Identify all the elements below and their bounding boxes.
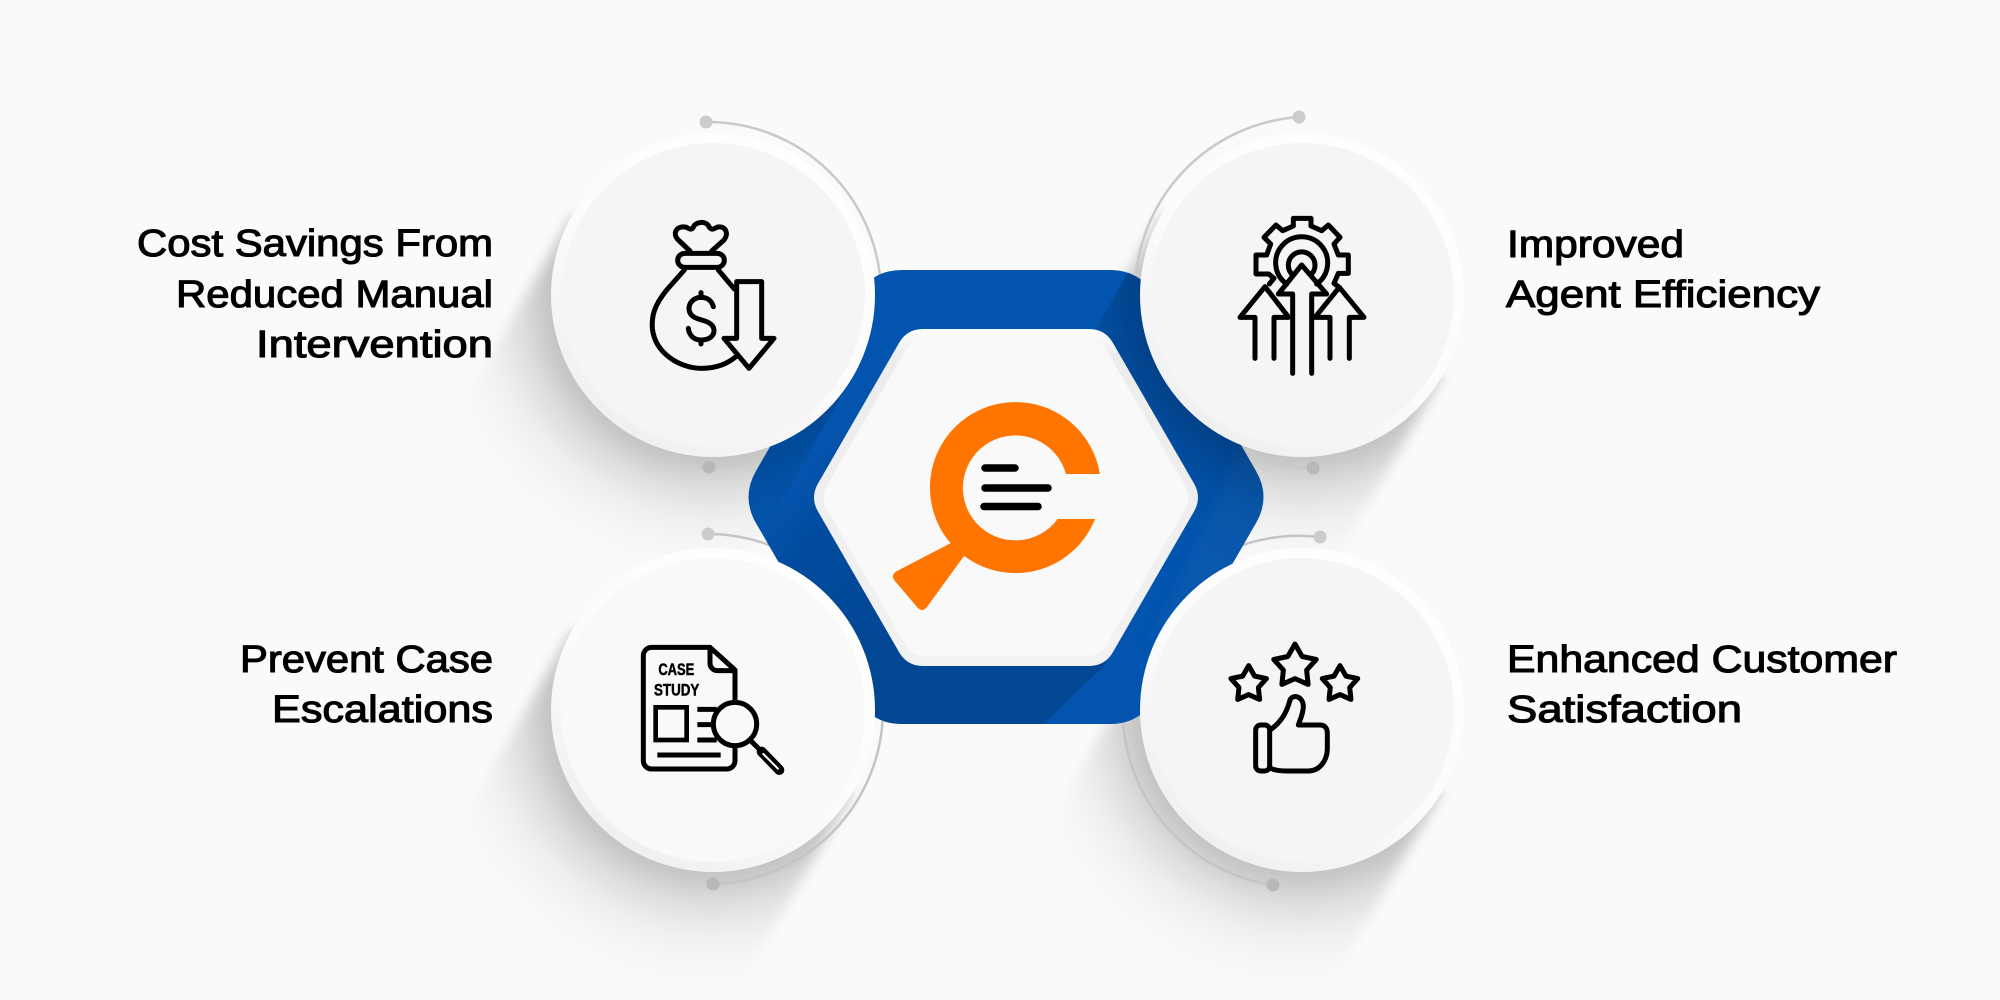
icon: thumbs up with three stars [1231,644,1358,771]
icon: gear with rising arrows [1240,218,1364,373]
inner white hexagon [814,329,1198,666]
text block: cost savings [137,223,493,366]
panel: case escalations circle [551,548,875,872]
circle shadow: cost savings [456,214,853,622]
text block: prevent case escalations: Prevent Case [240,639,493,681]
text block: cost savings: Intervention [256,324,493,366]
text block: agent efficiency: Improved [1507,224,1684,266]
text block: agent efficiency: Agent Efficiency [1506,274,1820,316]
panel: customer satisfaction circle [1140,548,1464,872]
icon: case study document with magnifier: CASE [658,661,694,679]
panel: agent efficiency circle [1140,133,1464,457]
text block: prevent case escalations [240,639,493,731]
text block: customer satisfaction: Satisfaction [1507,689,1742,731]
icon: case study document with magnifier: STUDY [654,681,699,699]
text block: customer satisfaction [1507,639,1897,731]
text block: agent efficiency [1506,224,1820,316]
circle shadow: case escalations [456,629,853,1000]
circle shadow: customer satisfaction [1045,629,1442,1000]
text block: cost savings: Cost Savings From [137,223,493,265]
central blue hexagon [748,270,1264,724]
orbit arc: cost savings [700,116,881,474]
orbit arc: agent efficiency [1135,110,1320,474]
panel: cost savings circle [551,133,875,457]
icon: case study document with magnifier [643,647,779,770]
text block: prevent case escalations: Escalations [272,689,493,731]
text block: customer satisfaction: Enhanced Customer [1507,639,1897,681]
orbit arc: customer satisfaction [1123,530,1326,892]
icon: money bag with down arrow [652,222,774,368]
text block: cost savings: Reduced Manual [176,274,493,316]
orbit arc: case escalations [702,528,883,890]
circle shadow: agent efficiency [1045,214,1442,622]
logo: orange magnifier C [893,402,1100,610]
